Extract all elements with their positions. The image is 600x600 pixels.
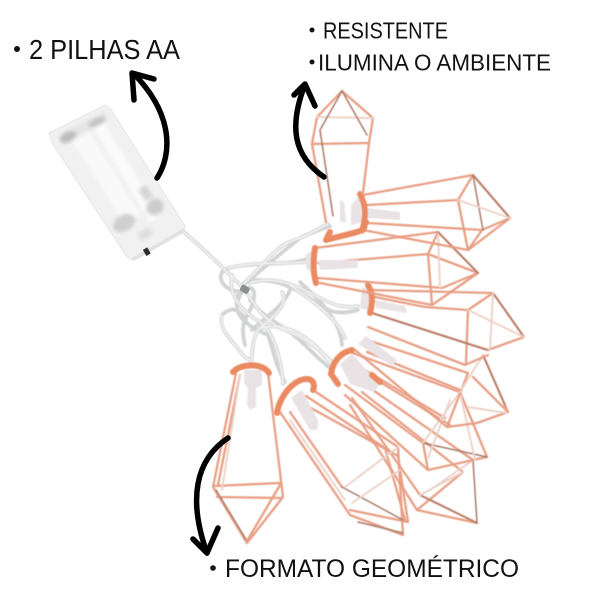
lantern: lower right — [331, 350, 487, 470]
lantern: bottom left vertical — [213, 365, 283, 543]
label: batteries: 2 PILHAS AA — [29, 34, 180, 65]
connector on the cable — [239, 284, 250, 295]
lantern: centre right upper — [360, 285, 524, 365]
battery box — [49, 105, 185, 261]
lantern: bottom-right rear — [350, 388, 477, 523]
wires: tangled cable — [185, 224, 358, 384]
lantern: centre right lower — [355, 336, 508, 427]
label: resistant: RESISTENTE — [323, 18, 448, 44]
lantern: bottom centre — [277, 379, 408, 535]
lantern: upper right top — [351, 175, 510, 250]
arrow: to battery label — [132, 73, 167, 178]
arrow: to format label — [193, 438, 228, 553]
label: lights the room: ILUMINA O AMBIENTE — [318, 50, 551, 76]
lantern: upper right middle — [306, 232, 478, 305]
arrow: to top labels — [294, 84, 324, 177]
lantern: top vertical — [312, 91, 373, 240]
label: geometric format: FORMATO GEOMÉTRICO — [225, 554, 519, 583]
